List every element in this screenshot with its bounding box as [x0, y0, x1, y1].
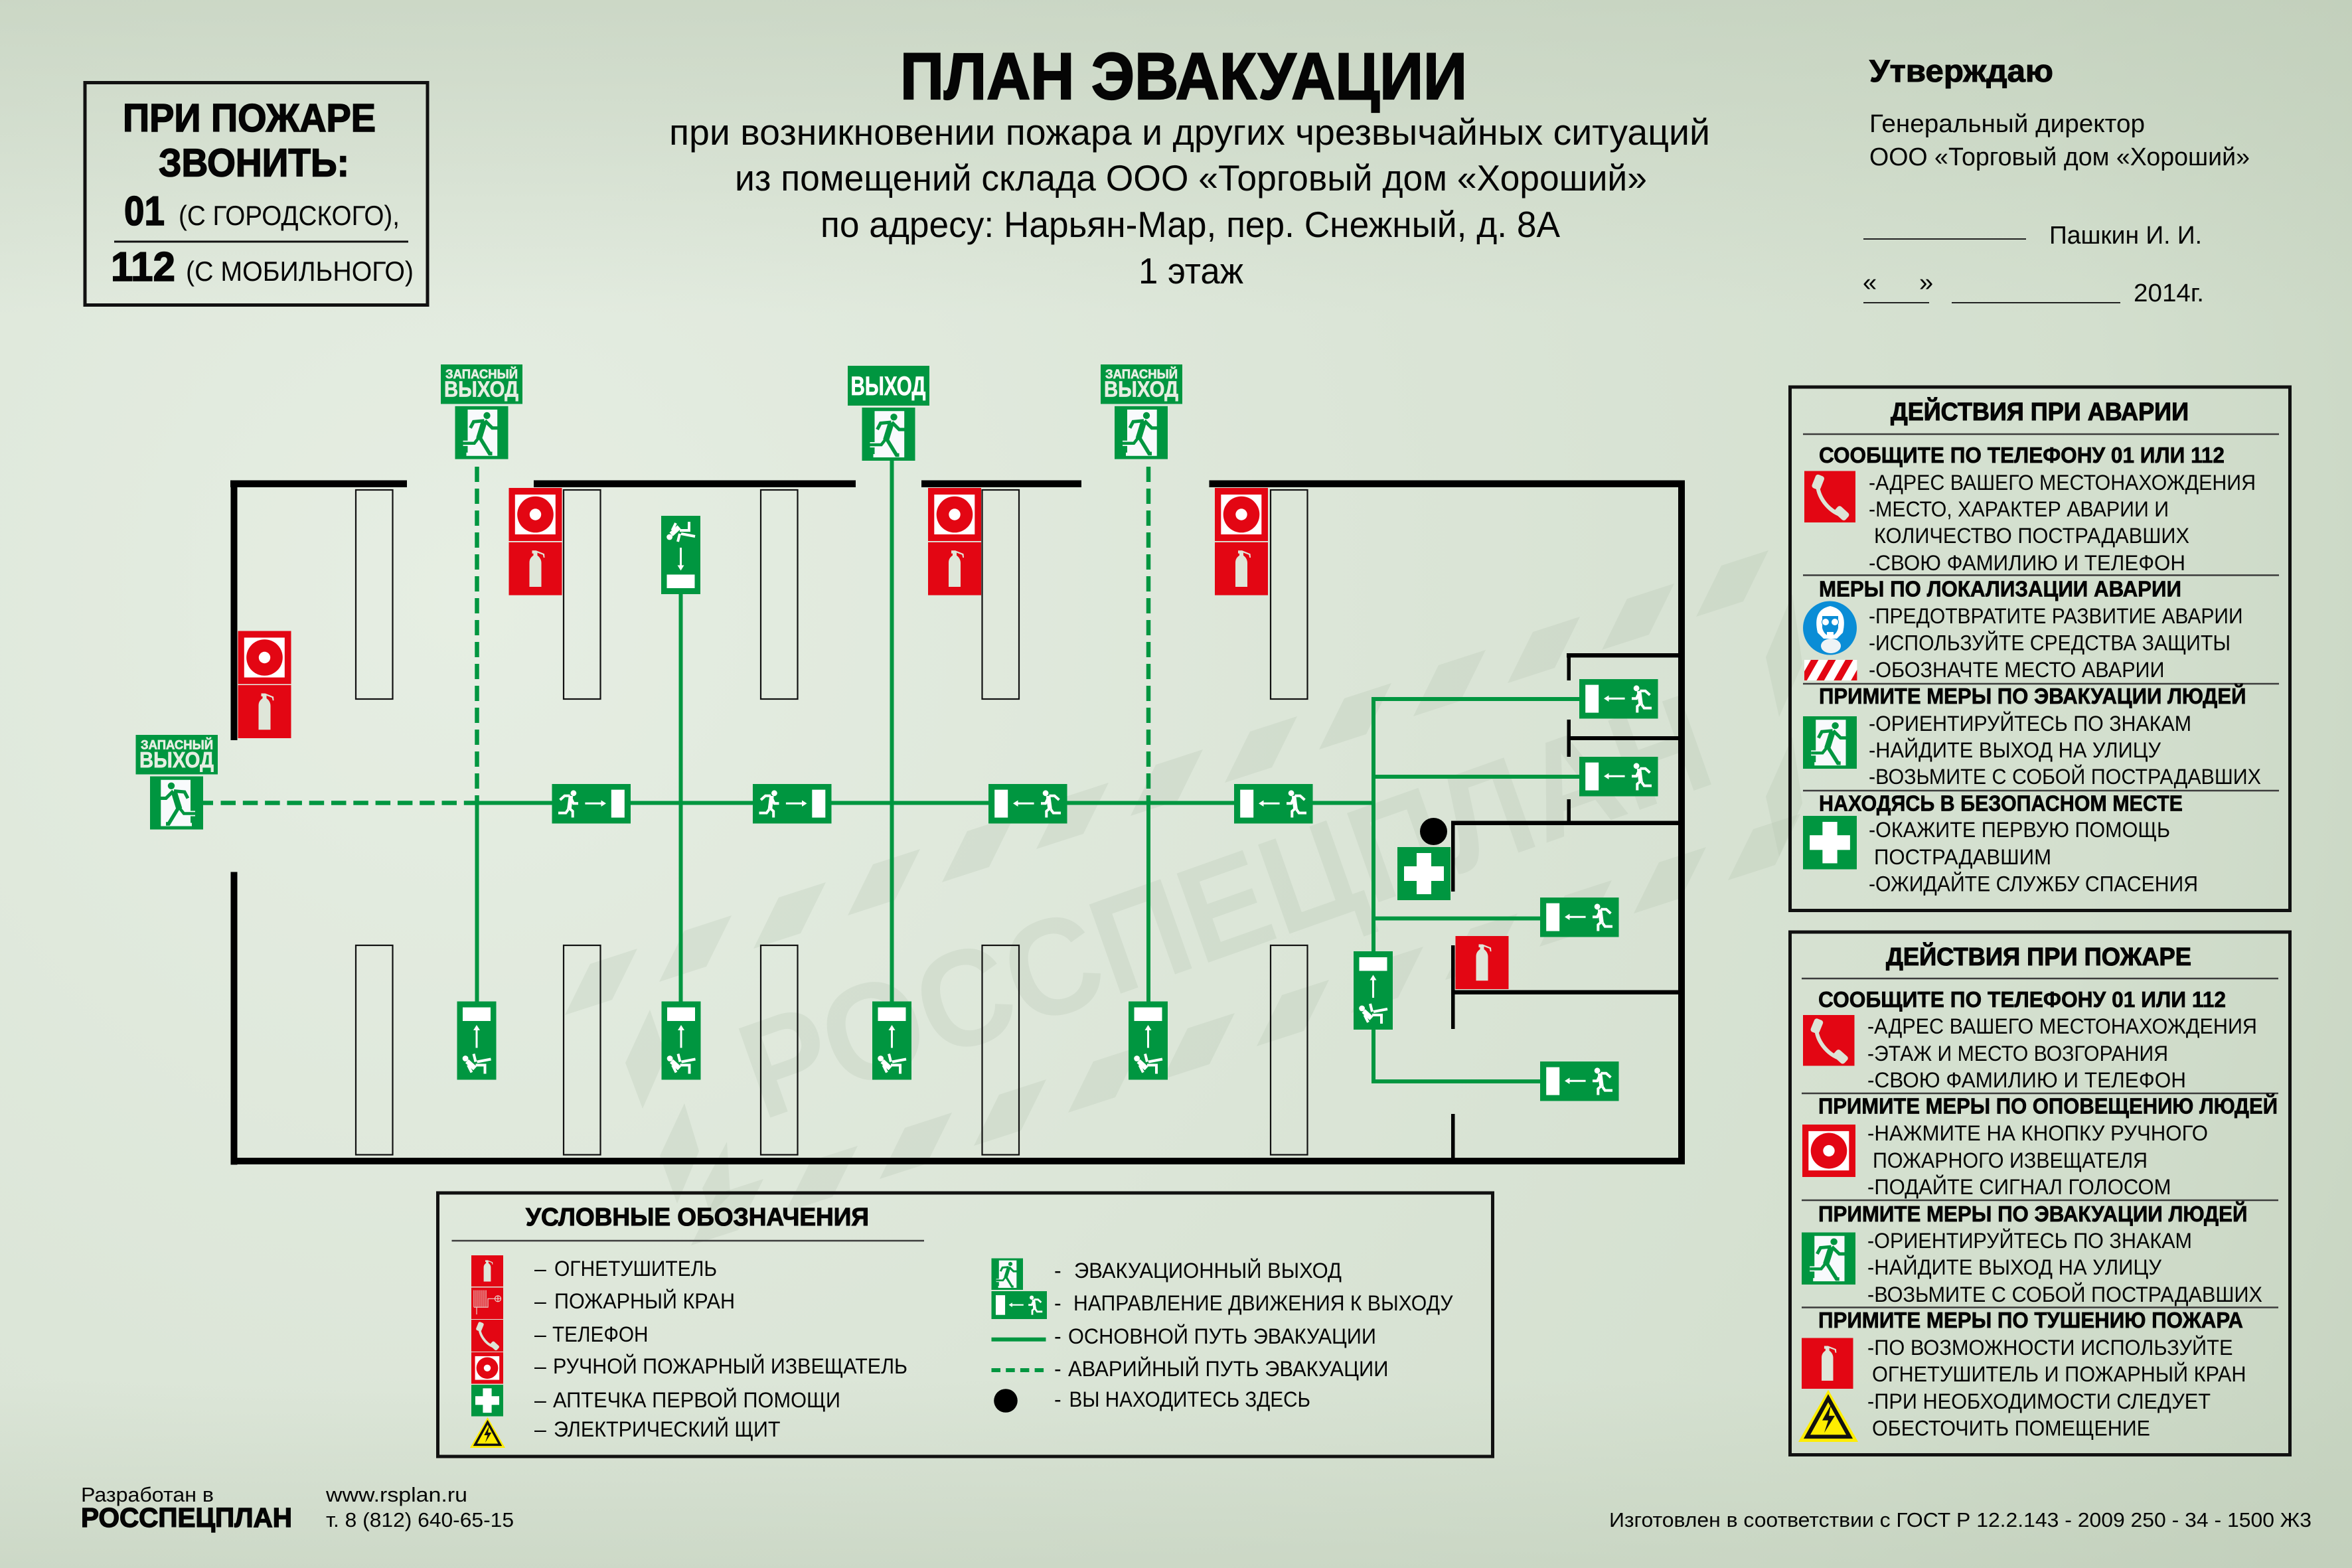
section: extinguish: ОГНЕТУШИТЕЛЬ И ПОЖАРНЫЙ КРАН [1872, 1362, 2246, 1386]
section: report by phone: КОЛИЧЕСТВО ПОСТРАДАВШИХ [1874, 524, 2189, 548]
section: localisation: -ИСПОЛЬЗУЙТЕ СРЕДСТВА ЗАЩИТЫ [1869, 631, 2231, 655]
footer: developer: Разработан в [81, 1483, 214, 1506]
number 112: 112 [111, 244, 175, 290]
section: evacuate [1803, 683, 2261, 789]
exit sign: top spare exit 2 [1101, 364, 1182, 459]
direction sign: left 2 [1234, 784, 1313, 823]
section: localisation: МЕРЫ ПО ЛОКАЛИЗАЦИИ АВАРИИ [1819, 576, 2181, 601]
section: report by phone: -МЕСТО, ХАРАКТЕР АВАРИИ И [1869, 497, 2169, 521]
legend: electrical panel: – [534, 1417, 546, 1441]
from mobile: (С МОБИЛЬНОГО) [186, 256, 414, 287]
panel: actions in emergency [1790, 387, 2290, 911]
legend heading: УСЛОВНЫЕ ОБОЗНАЧЕНИЯ [526, 1204, 869, 1231]
exit sign: top spare exit 1: ВЫХОД [444, 377, 518, 401]
direction sign: room 2 [1579, 757, 1658, 797]
section: notify people: ПОЖАРНОГО ИЗВЕЩАТЕЛЯ [1873, 1148, 2148, 1172]
subtitle: при возникновении пожара и других чрезвычайных ситуаций [669, 112, 1710, 153]
exit sign: left spare exit: ВЫХОД [139, 747, 214, 772]
subtitle: 1 этаж [1138, 250, 1243, 291]
legend: first aid kit [471, 1385, 840, 1417]
legend: extinguisher [471, 1255, 717, 1287]
legend: evacuation exit: ЭВАКУАЦИОННЫЙ ВЫХОД [1074, 1259, 1342, 1283]
section: extinguish: -ПО ВОЗМОЖНОСТИ ИСПОЛЬЗУЙТЕ [1867, 1336, 2233, 1360]
from landline: (С ГОРОДСКОГО), [179, 200, 400, 231]
section: localisation [1800, 576, 2242, 685]
exit sign: left spare exit [135, 735, 218, 830]
legend: extinguisher: ОГНЕТУШИТЕЛЬ [554, 1257, 717, 1281]
columns [356, 490, 1308, 1155]
exit sign: top spare exit 1 [441, 364, 522, 459]
footer: standard note: Изготовлен в соответствии с ГОСТ Р 12.2.143 - 2009 250 - 34 - 1500 Ж3 [1609, 1508, 2312, 1531]
heading: call on fire: ПРИ ПОЖАРЕ [123, 96, 376, 140]
section: evacuate: -ОРИЕНТИРУЙТЕСЬ ПО ЗНАКАМ [1869, 712, 2191, 736]
legend: you are here: ВЫ НАХОДИТЕСЬ ЗДЕСЬ [1069, 1387, 1310, 1411]
section: report by phone: -АДРЕС ВАШЕГО МЕСТОНАХОЖДЕНИЯ [1869, 471, 2256, 495]
exit sign: top spare exit 1: ЗАПАСНЫЙ [445, 367, 518, 382]
section: notify people [1802, 1093, 2278, 1199]
legend: you are here: - [1054, 1387, 1061, 1411]
section: evacuate: -НАЙДИТЕ ВЫХОД НА УЛИЦУ [1867, 1255, 2162, 1279]
watermark: РОССПЕЦПЛАН [565, 550, 1802, 1245]
section: extinguish [1798, 1308, 2246, 1442]
direction sign: up 4 [1129, 1001, 1168, 1079]
emergency evacuation routes (dashed) [203, 467, 1148, 803]
direction sign: right 1 [552, 784, 631, 823]
extinguisher: east room [1455, 936, 1508, 989]
director title: Генеральный директор [1869, 110, 2145, 138]
title: ПЛАН ЭВАКУАЦИИ [900, 39, 1467, 113]
section: safe place: -ОЖИДАЙТЕ СЛУЖБУ СПАСЕНИЯ [1869, 872, 2198, 896]
footer: contacts: т. 8 (812) 640-65-15 [326, 1508, 514, 1531]
direction sign: down [661, 516, 700, 594]
panel heading: ДЕЙСТВИЯ ПРИ АВАРИИ [1891, 396, 2189, 426]
legend: first aid kit: – [534, 1388, 546, 1412]
date quotes closing: » [1919, 269, 1933, 297]
icon: hazard stripes [1804, 660, 1857, 680]
legend: manual call point: – [534, 1354, 546, 1378]
section: extinguish: ПРИМИТЕ МЕРЫ ПО ТУШЕНИЮ ПОЖАРА [1818, 1308, 2243, 1332]
legend: manual call point [471, 1352, 907, 1383]
section: notify people: ПРИМИТЕ МЕРЫ ПО ОПОВЕЩЕНИЮ ЛЮДЕЙ [1818, 1093, 2278, 1118]
direction sign: up 3 [872, 1001, 911, 1079]
section: extinguish: -ПРИ НЕОБХОДИМОСТИ СЛЕДУЕТ [1867, 1389, 2211, 1413]
legend: manual call point: РУЧНОЙ ПОЖАРНЫЙ ИЗВЕЩАТЕЛЬ [553, 1354, 907, 1378]
approval heading: Утверждаю [1869, 53, 2053, 88]
signatory name: Пашкин И. И. [2049, 222, 2202, 250]
watermark: РОССПЕЦПЛАН: РОССПЕЦПЛАН [721, 665, 1729, 1148]
direction sign: up 2 [661, 1001, 701, 1079]
direction sign: up 1 [457, 1001, 497, 1079]
footer: contacts: www.rsplan.ru [325, 1483, 467, 1506]
direction sign: room 3 [1540, 898, 1619, 937]
direction sign: room 1 [1579, 679, 1658, 718]
legend: main route: - [1054, 1324, 1061, 1348]
section: localisation: -ПРЕДОТВРАТИТЕ РАЗВИТИЕ АВАРИИ [1869, 604, 2242, 628]
section: evacuate: -НАЙДИТЕ ВЫХОД НА УЛИЦУ [1869, 738, 2161, 762]
icon: protective mask [1803, 601, 1857, 655]
section: evacuate: -ВОЗЬМИТЕ С СОБОЙ ПОСТРАДАВШИХ [1869, 765, 2261, 789]
section: report by phone: -СВОЮ ФАМИЛИЮ И ТЕЛЕФОН [1867, 1068, 2186, 1092]
direction sign: right 2 [753, 784, 831, 823]
year: 2014г. [2134, 279, 2204, 307]
panel: actions in fire [1790, 932, 2290, 1455]
legend: fire hydrant: ПОЖАРНЫЙ КРАН [554, 1289, 735, 1313]
legend: telephone: ТЕЛЕФОН [552, 1322, 648, 1346]
legend: fire hydrant: – [534, 1289, 546, 1313]
subtitle [669, 112, 1710, 291]
company name: ООО «Торговый дом «Хороший» [1869, 143, 2250, 171]
legend: extinguisher: – [534, 1257, 546, 1281]
approval block [1863, 53, 2250, 307]
fire equipment: top 1 [509, 488, 562, 595]
subtitle: по адресу: Нарьян-Мар, пер. Снежный, д. 8А [821, 204, 1560, 245]
legend: emergency route: АВАРИЙНЫЙ ПУТЬ ЭВАКУАЦИИ [1068, 1357, 1389, 1381]
section: report by phone [1804, 443, 2256, 575]
main evacuation routes [477, 461, 1579, 1081]
direction sign: room 4 [1540, 1061, 1619, 1101]
section: evacuate: -ВОЗЬМИТЕ С СОБОЙ ПОСТРАДАВШИХ [1867, 1283, 2262, 1306]
legend: you are here [994, 1387, 1310, 1413]
section: evacuate: ПРИМИТЕ МЕРЫ ПО ЭВАКУАЦИИ ЛЮДЕЙ [1818, 1201, 2248, 1226]
legend: first aid kit: АПТЕЧКА ПЕРВОЙ ПОМОЩИ [553, 1388, 840, 1412]
panel: legend [438, 1193, 1492, 1456]
footer: developer [81, 1483, 292, 1533]
legend: direction to exit: НАПРАВЛЕНИЕ ДВИЖЕНИЯ К ВЫХОДУ [1073, 1291, 1453, 1315]
section: report by phone: СООБЩИТЕ ПО ТЕЛЕФОНУ 01 ИЛИ 112 [1818, 987, 2226, 1012]
exit sign: left spare exit: ЗАПАСНЫЙ [141, 738, 213, 753]
legend: main route: ОСНОВНОЙ ПУТЬ ЭВАКУАЦИИ [1068, 1324, 1376, 1348]
exit sign: main exit [848, 366, 929, 461]
number 01: 01 [124, 189, 165, 234]
direction sign: up 5 [1354, 951, 1393, 1030]
section: report by phone: -СВОЮ ФАМИЛИЮ И ТЕЛЕФОН [1869, 551, 2185, 575]
fire equipment: top 2 [928, 488, 981, 595]
legend: fire hydrant [471, 1288, 735, 1319]
section: evacuate: -ОРИЕНТИРУЙТЕСЬ ПО ЗНАКАМ [1867, 1229, 2192, 1253]
exit sign: top spare exit 2: ЗАПАСНЫЙ [1105, 367, 1178, 382]
section: report by phone [1803, 987, 2257, 1092]
section: safe place: ПОСТРАДАВШИМ [1874, 845, 2051, 869]
section: extinguish: ОБЕСТОЧИТЬ ПОМЕЩЕНИЕ [1872, 1417, 2150, 1441]
legend: direction to exit: - [1054, 1291, 1061, 1315]
section: evacuate [1802, 1201, 2262, 1306]
you are here marker [1420, 818, 1447, 845]
subtitle: из помещений склада ООО «Торговый дом «Хороший» [735, 157, 1647, 198]
panel: fire call numbers [85, 82, 428, 305]
legend: telephone: – [534, 1322, 546, 1346]
legend: emergency route: - [1054, 1357, 1061, 1381]
footer: developer: РОССПЕЦПЛАН [81, 1502, 292, 1533]
section: report by phone: -АДРЕС ВАШЕГО МЕСТОНАХОЖДЕНИЯ [1867, 1014, 2257, 1038]
heading: call: ЗВОНИТЬ: [159, 141, 349, 185]
section: report by phone: -ЭТАЖ И МЕСТО ВОЗГОРАНИЯ [1867, 1042, 2168, 1065]
section: safe place: НАХОДЯСЬ В БЕЗОПАСНОМ МЕСТЕ [1819, 791, 2183, 815]
section: notify people: -ПОДАЙТЕ СИГНАЛ ГОЛОСОМ [1867, 1175, 2171, 1199]
exit sign: top spare exit 2: ВЫХОД [1104, 377, 1178, 401]
section: report by phone: СООБЩИТЕ ПО ТЕЛЕФОНУ 01 ИЛИ 112 [1819, 443, 2225, 467]
legend: evacuation exit: - [1054, 1259, 1061, 1283]
section: localisation: -ОБОЗНАЧТЕ МЕСТО АВАРИИ [1869, 658, 2164, 682]
building walls [230, 481, 1685, 1164]
legend: direction to exit [992, 1291, 1453, 1319]
first aid kit [1397, 847, 1450, 900]
fire equipment: left wall [238, 631, 291, 738]
exit sign: main exit: ВЫХОД [851, 372, 925, 401]
legend: evacuation exit [992, 1259, 1342, 1290]
section: safe place: -ОКАЖИТЕ ПЕРВУЮ ПОМОЩЬ [1869, 818, 2170, 842]
date quotes: « [1863, 269, 1877, 297]
section: notify people: -НАЖМИТЕ НА КНОПКУ РУЧНОГО [1867, 1121, 2208, 1145]
legend: telephone [471, 1320, 648, 1352]
panel heading: ДЕЙСТВИЯ ПРИ ПОЖАРЕ [1886, 941, 2191, 971]
floor plan [135, 364, 1685, 1164]
footer: contacts [325, 1483, 514, 1531]
section: evacuate: ПРИМИТЕ МЕРЫ ПО ЭВАКУАЦИИ ЛЮДЕЙ [1819, 683, 2246, 708]
legend: electrical panel: ЭЛЕКТРИЧЕСКИЙ ЩИТ [554, 1417, 781, 1441]
legend: electrical panel [470, 1417, 781, 1448]
direction sign: left 1 [988, 784, 1067, 823]
fire equipment: top 3 [1215, 488, 1268, 595]
section: safe place [1803, 791, 2198, 896]
